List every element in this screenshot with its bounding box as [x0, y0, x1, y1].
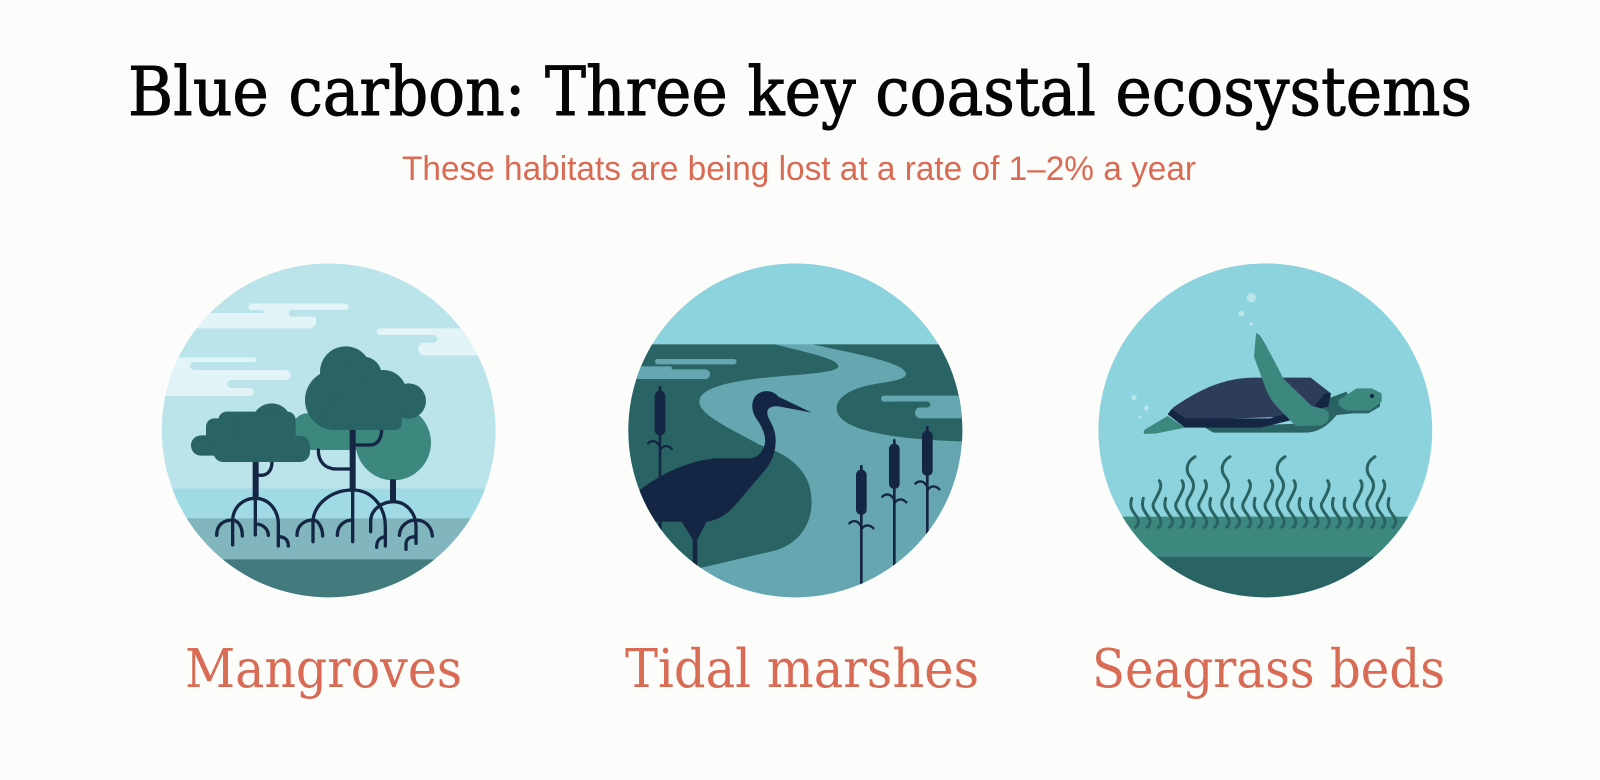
sky and shore bands — [162, 264, 496, 598]
label: mangroves: Mangroves — [185, 639, 462, 700]
illustration: seagrass beds — [1098, 264, 1432, 598]
label: tidal marshes: Tidal marshes — [625, 639, 979, 700]
water pools — [636, 359, 962, 418]
turtle — [1144, 333, 1382, 434]
illustration: mangroves — [162, 264, 496, 598]
cattail: right back — [914, 426, 940, 534]
water and seabed — [1098, 264, 1432, 598]
cattail: right middle — [882, 439, 906, 572]
subtitle: These habitats are being lost at a rate of 1–2% a year — [402, 150, 1196, 188]
sky and water — [628, 264, 962, 598]
illustration: tidal marshes — [628, 264, 962, 598]
label: seagrass beds: Seagrass beds — [1092, 639, 1445, 700]
clouds — [165, 304, 478, 396]
marsh banks — [628, 344, 962, 568]
small mangrove — [191, 403, 310, 546]
cattail: left — [648, 386, 672, 479]
title: Blue carbon: Three key coastal ecosystems — [128, 53, 1472, 131]
back tree — [293, 405, 432, 549]
heron — [630, 391, 812, 570]
bubbles — [1131, 293, 1256, 419]
cattail: right front — [849, 465, 873, 588]
tall mangrove — [297, 346, 426, 547]
seagrass — [1131, 457, 1396, 527]
